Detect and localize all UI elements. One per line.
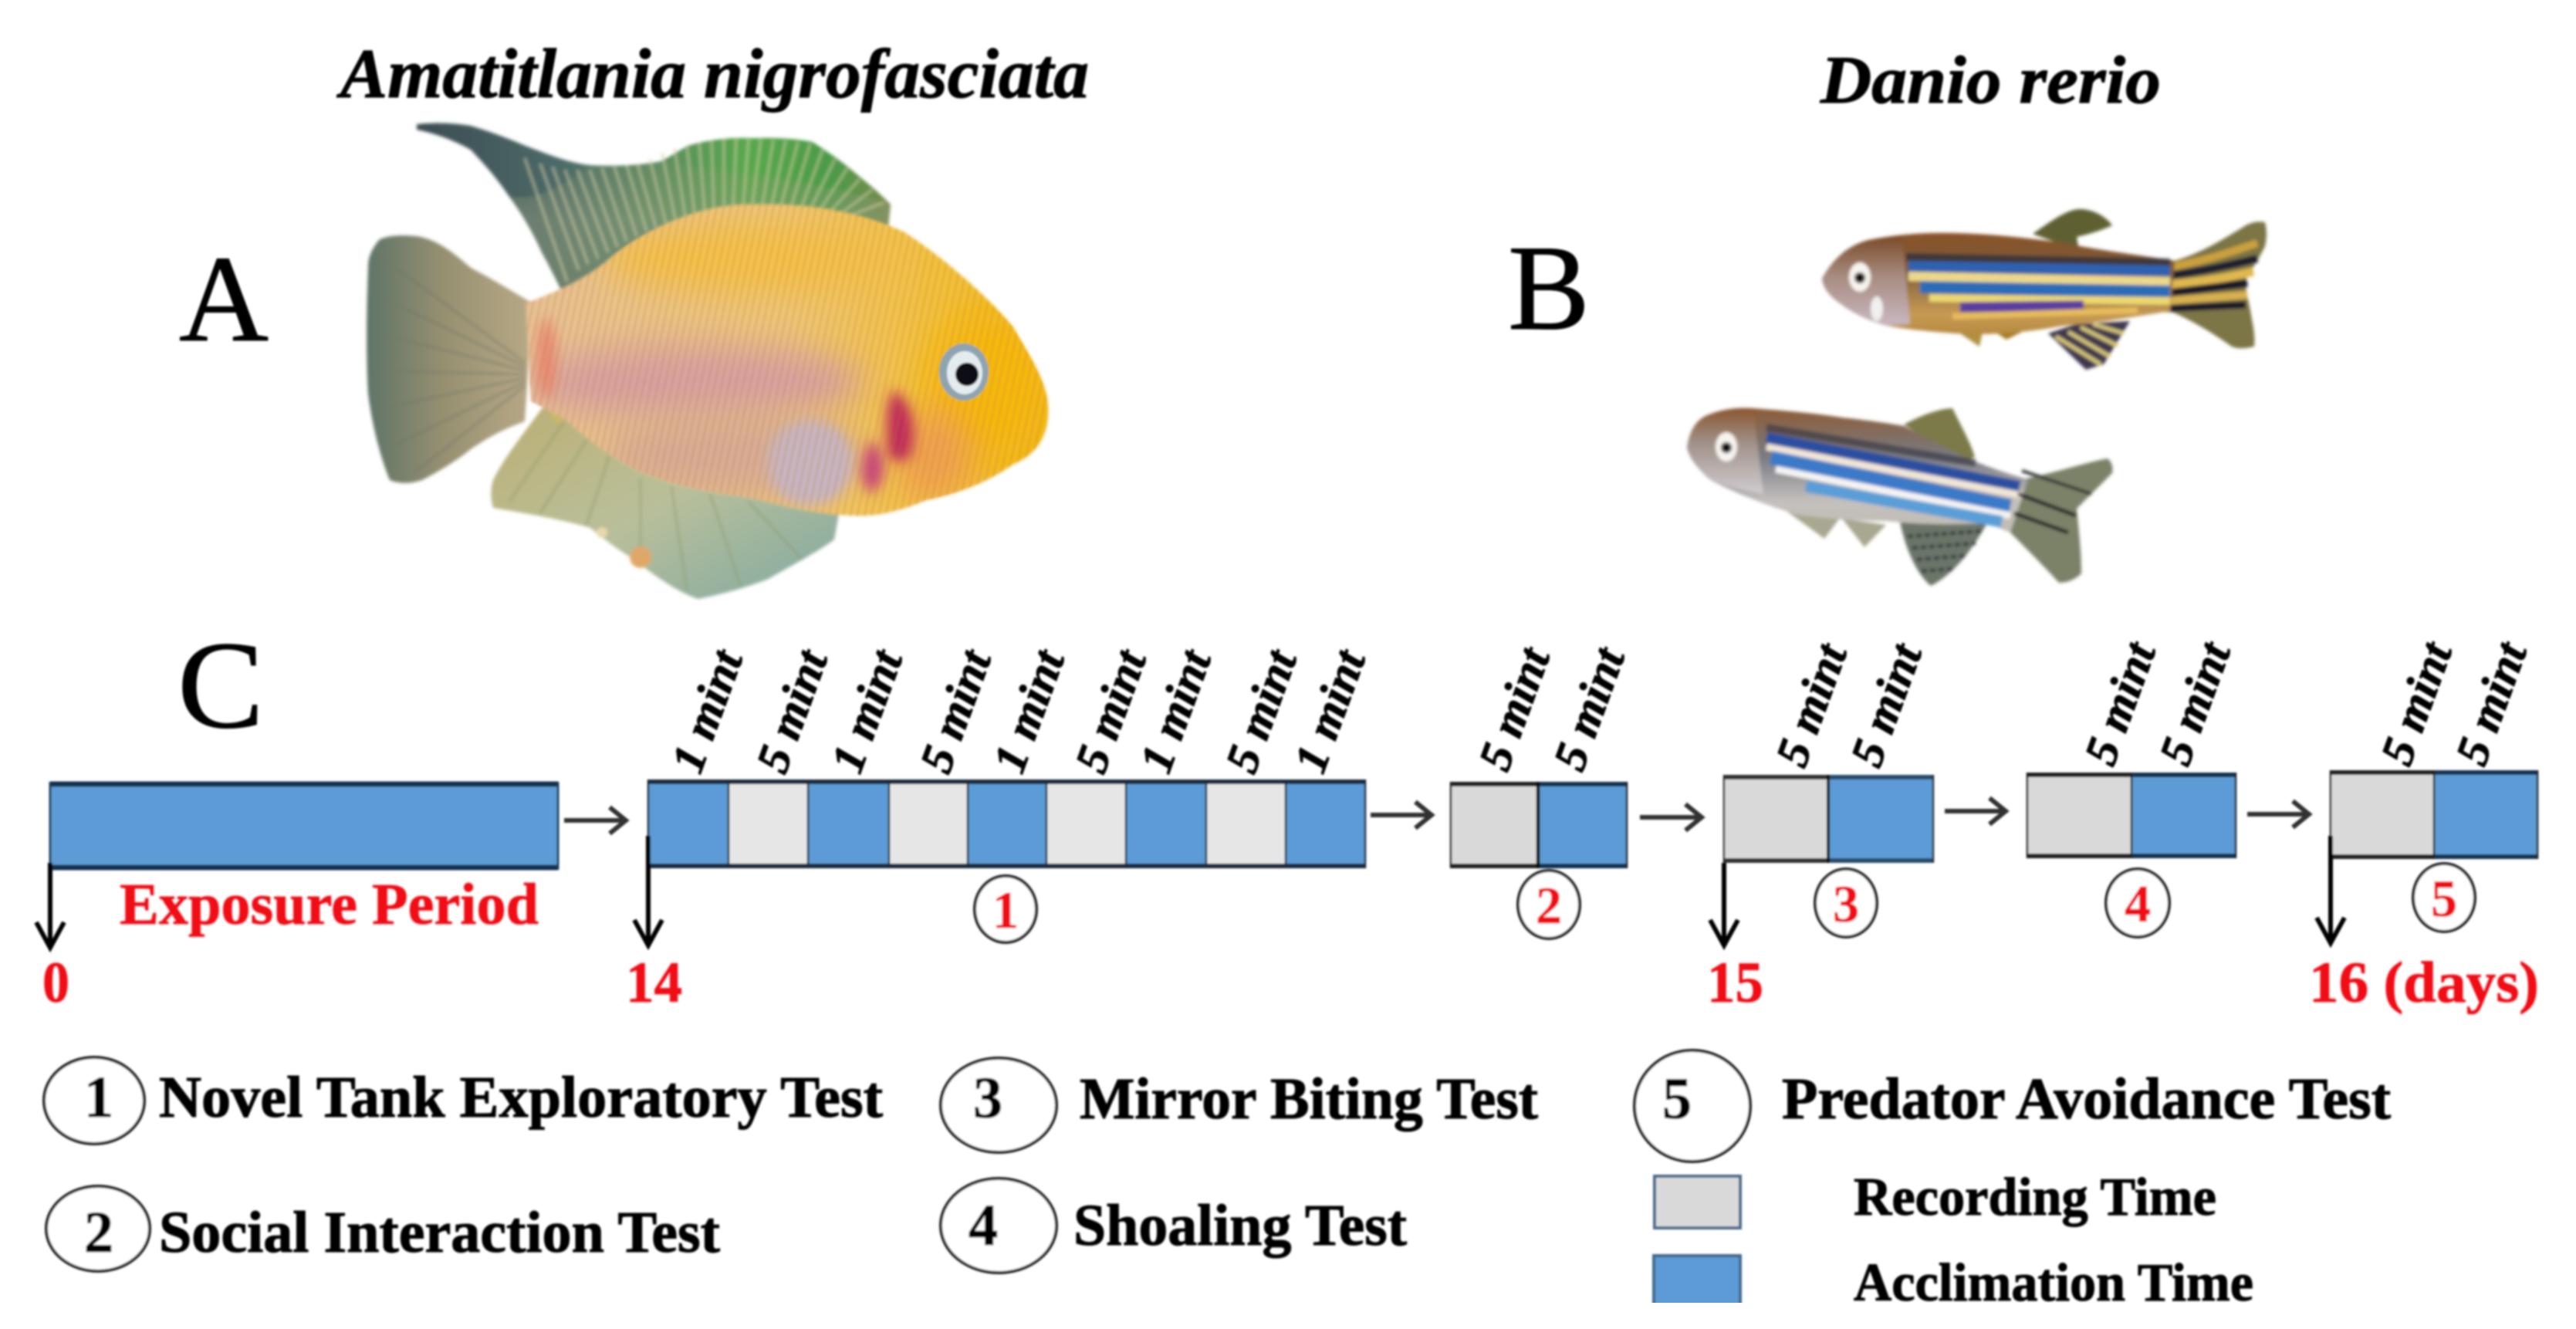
upper zebrafish stripes [1906,257,2170,364]
panel: test 1 timeline bar [648,779,1365,868]
arrow: test 1 to test 2 [1371,802,1432,828]
illustration: Danio rerio fish, upper [1822,209,2267,370]
timeline marker 4 [2106,869,2169,937]
arrow: day 16 marker [2317,836,2344,943]
duration labels: test 1: 5 mint [746,641,838,779]
arrow: test 3 to test 4 [1945,798,2006,824]
duration labels: test 5: 5 mint [2446,634,2537,771]
timeline marker 5 [2413,864,2475,932]
duration labels: test 1: 1 mint [821,641,913,779]
illustration: Amatitlania nigrofasciata fish [367,123,1065,599]
legend item 5: Predator Avoidance Test: 5 [1662,1067,1692,1131]
duration labels: test 4 [2074,634,2241,771]
timeline marker 4: 4 [2125,874,2151,933]
duration labels: test 1: 5 mint [1215,641,1307,779]
duration labels: test 4: 5 mint [2149,634,2241,771]
legend item 5: Predator Avoidance Test: Predator Avoidance Test [1782,1067,2391,1131]
panel: exposure period bar [50,782,558,870]
arrow: day 0 marker [36,863,64,948]
duration labels: test 5: 5 mint [2371,634,2463,771]
duration labels: test 5 [2371,634,2537,771]
duration labels: test 3: 5 mint [1766,635,1858,773]
day label 0: 0 [42,951,69,1015]
fish A ventral fins [491,401,840,599]
legend item 2: Social Interaction Test [46,1186,720,1271]
day label 16 days: 16 (days) [2309,951,2539,1015]
legend item 4: Shoaling Test [941,1179,1407,1273]
panel: test 2 timeline bar [1451,782,1627,868]
panel letter C: C [177,617,264,755]
duration labels: test 1: 1 mint [1284,641,1376,779]
fish A tail fin [367,235,532,483]
arrow: test 4 to test 5 [2247,801,2309,827]
lower zebrafish stripes [1766,428,2091,571]
legend item 2: Social Interaction Test: 2 [84,1200,113,1265]
arrow: day 15 marker [1710,863,1738,945]
fish A body shading [525,201,1065,525]
legend item 3: Mirror Biting Test [941,1058,1538,1152]
legend key: Acclimation Time: Acclimation Time [1854,1253,2253,1313]
arrow: test 2 to test 3 [1640,804,1702,830]
legend item 5: Predator Avoidance Test [1635,1050,2391,1162]
panel: test 3 timeline bar [1724,775,1933,863]
upper zebrafish gill highlight [1871,296,1883,321]
legend item 1: Novel Tank Exploratory Test: Novel Tank Exploratory Test [159,1065,883,1130]
upper zebrafish fins [2033,209,2112,251]
label: Exposure Period: Exposure Period [120,872,539,937]
upper zebrafish tail stripes [2165,243,2257,309]
title: Danio rerio: Danio rerio [1820,43,2161,118]
duration labels: test 1 [661,641,1376,779]
fish A eye [939,343,989,401]
panel: test 5 timeline bar [2331,770,2537,859]
fish A body [526,204,1048,516]
upper zebrafish eye [1849,262,1871,292]
timeline marker 3: 3 [1833,874,1859,933]
timeline marker 5: 5 [2431,869,2457,928]
timeline marker 2 [1518,871,1580,938]
legend key: Recording Time: Recording Time [1854,1168,2216,1227]
duration labels: test 4: 5 mint [2074,634,2166,771]
legend item 4: Shoaling Test: Shoaling Test [1073,1193,1407,1258]
duration labels: test 1: 1 mint [661,641,753,779]
legend item 2: Social Interaction Test: Social Interaction Test [159,1200,720,1265]
panel letter B: B [1508,221,1590,356]
upper zebrafish head [1822,236,1910,326]
legend item 1: Novel Tank Exploratory Test: 1 [84,1065,113,1130]
day label 14: 14 [626,951,682,1015]
duration labels: test 3 [1766,635,1932,773]
arrow: exposure to test 1 [564,807,626,834]
duration labels: test 1: 5 mint [910,641,1002,779]
title: Amatitlania nigrofasciata: Amatitlania nigrofasciata [336,35,1089,113]
fish A dorsal fin [417,123,891,295]
panel letter A: A [179,230,269,367]
lower zebrafish fins [1904,408,1975,463]
legend item 3: Mirror Biting Test: Mirror Biting Test [1080,1067,1538,1131]
legend item 1: Novel Tank Exploratory Test [44,1057,883,1144]
duration labels: test 2: 5 mint [1543,639,1635,776]
duration labels: test 1: 1 mint [983,641,1075,779]
illustration: Danio rerio fish, lower [1687,408,2112,586]
timeline marker 3 [1815,869,1877,937]
legend item 3: Mirror Biting Test: 3 [973,1066,1002,1131]
duration labels: test 2 [1469,639,1635,776]
panel: test 4 timeline bar [2027,773,2236,858]
duration labels: test 3: 5 mint [1841,635,1932,773]
duration labels: test 2: 5 mint [1469,639,1560,776]
timeline marker 1: 1 [992,881,1019,939]
arrow: day 14 marker [634,836,662,945]
timeline marker 1 [975,876,1036,942]
legend item 4: Shoaling Test: 4 [969,1193,998,1258]
lower zebrafish body [1687,408,2028,533]
upper zebrafish body [1822,233,2175,334]
legend key: Recording Time [1655,1168,2216,1228]
duration labels: test 1: 5 mint [1065,641,1157,779]
day label 15: 15 [1707,951,1763,1015]
timeline marker 2: 2 [1536,876,1562,935]
duration labels: test 1: 1 mint [1130,641,1222,779]
legend key: Acclimation Time [1654,1253,2253,1317]
lower zebrafish head [1687,408,1763,494]
lower zebrafish eye [1716,432,1737,462]
